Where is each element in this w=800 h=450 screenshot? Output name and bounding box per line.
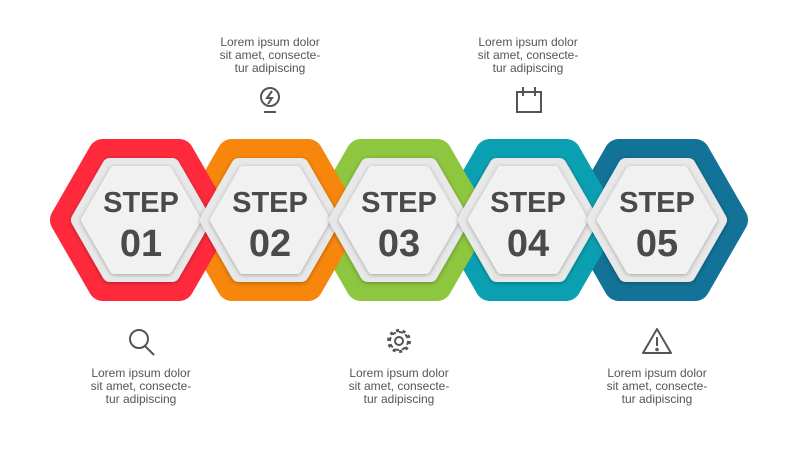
step 1 (79, 166, 203, 274)
ring 1 (65, 154, 217, 286)
icon: gear (388, 330, 410, 352)
step 3: STEP (361, 187, 437, 219)
step 1: 01 (120, 223, 162, 265)
step 5 (595, 166, 719, 274)
text: step 2 top: tur adipiscing (235, 61, 305, 75)
ring 4 (452, 154, 604, 286)
text: step 5 bottom: Lorem ipsum dolor (607, 366, 707, 380)
text: step 2 top (220, 35, 320, 75)
step 5: 05 (636, 223, 678, 265)
text: step 5 bottom: sit amet, consecte- (607, 379, 707, 393)
text: step 1 bottom: sit amet, consecte- (91, 379, 191, 393)
icon: search (130, 330, 154, 355)
step 2: STEP (232, 187, 308, 219)
text: step 5 bottom (607, 366, 707, 406)
step 4 (466, 166, 590, 274)
step 3 (337, 166, 461, 274)
text: step 4 top (478, 35, 578, 75)
text: step 5 bottom: tur adipiscing (622, 392, 692, 406)
text: step 4 top: Lorem ipsum dolor (478, 35, 578, 49)
text: step 3 bottom (349, 366, 449, 406)
text: step 4 top: tur adipiscing (493, 61, 563, 75)
icon: calendar (517, 87, 541, 112)
text: step 3 bottom: Lorem ipsum dolor (349, 366, 449, 380)
text: step 1 bottom: tur adipiscing (106, 392, 176, 406)
text: step 4 top: sit amet, consecte- (478, 48, 578, 62)
step 3: 03 (378, 223, 420, 265)
step 2 (208, 166, 332, 274)
step 2: 02 (249, 223, 291, 265)
text: step 3 bottom: tur adipiscing (364, 392, 434, 406)
text: step 2 top: Lorem ipsum dolor (220, 35, 320, 49)
text: step 3 bottom: sit amet, consecte- (349, 379, 449, 393)
text: step 2 top: sit amet, consecte- (220, 48, 320, 62)
step 1: STEP (103, 187, 179, 219)
ring 2 (194, 154, 346, 286)
step 4: 04 (507, 223, 549, 265)
step 5: STEP (619, 187, 695, 219)
text: step 1 bottom (91, 366, 191, 406)
icon: lightbulb (261, 88, 279, 112)
step 4: STEP (490, 187, 566, 219)
ring 3 (323, 154, 475, 286)
icon: warning (643, 329, 671, 353)
text: step 1 bottom: Lorem ipsum dolor (91, 366, 191, 380)
ring 5 (581, 154, 733, 286)
